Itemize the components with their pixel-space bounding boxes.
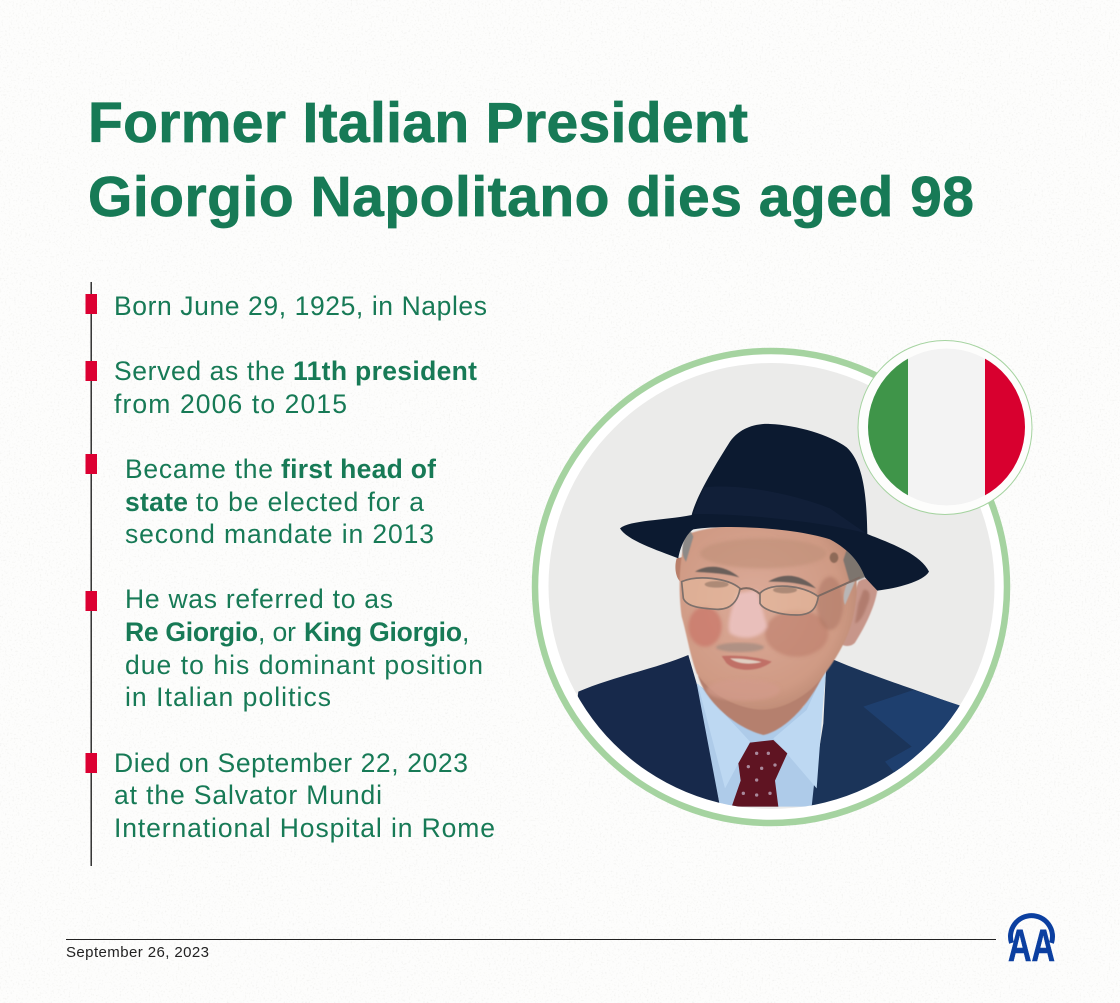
timeline item: King Giorgio: due to his dominant position: [125, 650, 483, 680]
timeline item: second mandate: [86, 454, 436, 549]
eyes: [705, 581, 729, 588]
title: Giorgio Napolitano dies aged 98: [88, 165, 974, 229]
suit: [578, 655, 720, 803]
shirt: [697, 667, 827, 807]
mouth: [722, 656, 772, 670]
timeline item: King Giorgio: [86, 584, 483, 712]
eyebrows: [695, 567, 739, 577]
timeline item: second mandate: state: [125, 487, 188, 517]
title: Former Italian President: [88, 91, 748, 155]
timeline item: King Giorgio: He was referred to as: [125, 584, 393, 614]
moustache shadow: [716, 643, 764, 652]
timeline item: second mandate: second mandate in 2013: [125, 519, 434, 549]
hat band: [693, 487, 866, 533]
timeline: [86, 282, 495, 866]
timeline item: president: [86, 356, 477, 419]
timeline item: died: International Hospital in Rome: [114, 813, 495, 843]
neck: [698, 674, 824, 736]
face shading: [688, 538, 843, 701]
badge outline: [858, 340, 1032, 514]
timeline item: King Giorgio: ,: [462, 617, 469, 647]
timeline item: second mandate: first head of: [281, 454, 436, 484]
hair: [682, 530, 693, 562]
timeline item: president: 11th president: [293, 356, 477, 386]
Italian flag: [866, 345, 1027, 510]
timeline item: King Giorgio: King Giorgio: [304, 617, 462, 647]
timeline item: second mandate: Became the: [125, 454, 273, 484]
glasses: [682, 578, 818, 615]
timeline item: died: [86, 748, 495, 843]
timeline item: born: Born June 29, 1925, in Naples: [114, 291, 487, 321]
portrait illustration: [563, 424, 970, 807]
photo background: [548, 363, 994, 809]
Anadolu Agency logo: AA: [1008, 920, 1055, 971]
timeline item: died: at the Salvator Mundi: [114, 780, 382, 810]
title: [88, 91, 974, 229]
footer line: [66, 939, 996, 940]
timeline item: second mandate: to be elected for a: [196, 487, 424, 517]
timeline item: president: Served as the: [114, 356, 285, 386]
face: [680, 525, 857, 710]
timeline item: King Giorgio: Re Giorgio: [125, 617, 258, 647]
timeline vertical line: [90, 282, 92, 866]
left ear: [675, 557, 682, 582]
timeline item: King Giorgio: , or: [258, 617, 296, 647]
flag badge: [858, 340, 1032, 514]
green ring: [535, 351, 1007, 823]
timeline item: King Giorgio: in Italian politics: [125, 682, 331, 712]
hat: [620, 424, 929, 591]
portrait in ring: [535, 351, 1007, 823]
date: September 26, 2023: [66, 944, 209, 961]
tie: [732, 740, 787, 807]
Anadolu Agency logo: [1008, 916, 1055, 971]
right ear: [840, 578, 877, 646]
timeline item: died: Died on September 22, 2023: [114, 748, 468, 778]
age spot: [830, 552, 838, 563]
timeline item: president: from 2006 to 2015: [114, 389, 347, 419]
